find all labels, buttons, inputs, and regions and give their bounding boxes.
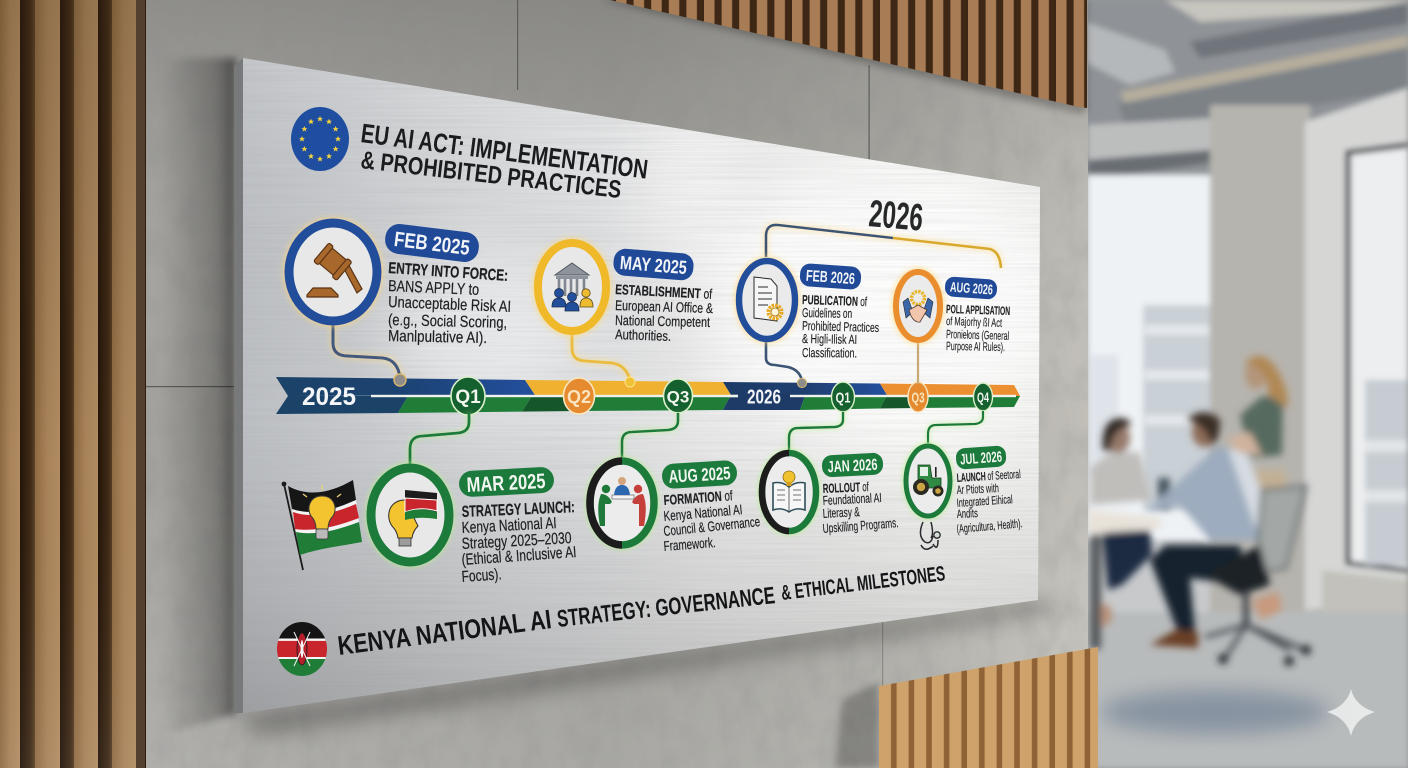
icon: handshake and gear: [903, 292, 933, 322]
centre line: [371, 395, 1016, 397]
description: PUBLICATION of: [802, 292, 868, 309]
description: ESTABLISHMENT of: [615, 281, 713, 302]
standing woman: [1228, 356, 1288, 540]
panel shadow: [160, 58, 1062, 736]
connector: [789, 412, 843, 450]
Q1 2025: Q1: [455, 387, 481, 408]
description: FORMATION of: [663, 487, 733, 508]
connector: [766, 342, 807, 388]
icon: tractor: [913, 465, 944, 496]
description: [822, 479, 899, 536]
milestone: Feb 2025: [289, 222, 511, 386]
background: concrete wall: [140, 0, 1088, 768]
description: [802, 292, 880, 360]
description: Framework.: [663, 534, 716, 554]
connector: [917, 343, 919, 384]
description: [956, 467, 1023, 536]
date pill: [799, 263, 862, 290]
date pill: FEB 2025: [393, 228, 471, 260]
connector: [622, 413, 678, 457]
description: Purpose AI Rules).: [946, 339, 1005, 354]
milestone: Jul 2026: [906, 411, 1023, 549]
description: Focus).: [461, 566, 502, 586]
Q1 2025: [451, 377, 485, 415]
table: [1088, 510, 1162, 649]
icon: Kenya badge: [277, 622, 327, 677]
description: Feundational AI: [822, 490, 882, 508]
description: Andits: [956, 506, 978, 521]
heading: Kenya National AI Strategy title: & ETHICAL MILESTONES: [780, 562, 946, 605]
ring: [371, 468, 449, 562]
milestone: Feb 2026: [739, 261, 880, 388]
description: Manlpulative AI).: [388, 328, 487, 347]
Q3 2026: Q3: [912, 390, 924, 406]
connector: [333, 325, 406, 386]
description: Kenya National AI: [663, 501, 743, 524]
description: Guidelines on: [802, 305, 852, 321]
icon: sparkle watermark: [1327, 689, 1375, 736]
icon: gavel: [307, 243, 362, 297]
description: [663, 487, 761, 554]
date pill: MAR 2025: [466, 470, 546, 497]
ring: [896, 272, 940, 340]
description: ENTRY INTO FORCE:: [388, 260, 509, 285]
description: Integrated Eihical: [956, 492, 1013, 510]
Q1 2026: [832, 382, 854, 412]
year label 2025: 2025: [302, 383, 356, 411]
ring: [762, 453, 816, 531]
ring: [739, 261, 795, 339]
date pill: MAY 2025: [619, 253, 688, 279]
description: Prohibited Practices: [802, 318, 880, 335]
connector: [410, 413, 469, 465]
date pill: [384, 222, 480, 264]
description: Authorities.: [615, 326, 671, 344]
Q3 2026: [908, 382, 928, 412]
description: [946, 302, 1010, 354]
heading: Kenya National AI Strategy title: [336, 562, 946, 661]
description: ROLLOUT of: [822, 479, 869, 496]
icon: bulb and Kenya flag: [389, 490, 437, 546]
description: Classification.: [802, 345, 857, 360]
date pill: [661, 460, 738, 489]
description: LAUNCH of Seetoral: [956, 467, 1021, 485]
background: left wood slats: [0, 0, 146, 768]
description: [615, 281, 714, 344]
icon: book and bulb: [773, 471, 805, 512]
icon: institution and people: [552, 263, 593, 311]
icon: stethoscope: [920, 522, 938, 549]
description: (Agricultura, Health).: [956, 516, 1023, 536]
seated woman: [1090, 418, 1170, 626]
background: top wood slats: [600, 0, 1087, 114]
Q3 2025: Q3: [667, 388, 689, 406]
date pill: AUG 2025: [668, 463, 731, 487]
Q4 2026: [974, 383, 992, 411]
icon: document with gear: [754, 277, 782, 321]
description: [461, 499, 577, 586]
ring: [289, 223, 377, 321]
date pill: JAN 2026: [827, 457, 878, 476]
description: Ar Ptiots with: [956, 481, 999, 497]
description: & Higli-Ilisk AI: [802, 331, 857, 347]
description: (e.g., Social Scoring,: [388, 312, 507, 332]
date pill: JUL 2026: [960, 449, 1003, 468]
Q3 2025: [664, 379, 692, 413]
heading: EU AI Act title: EU AI ACT: IMPLEMENTATION: [359, 118, 650, 185]
milestone: Jan 2026: [762, 412, 899, 536]
milestone: Aug 2025: [590, 413, 761, 554]
year label 2026: 2026: [747, 386, 781, 408]
concrete column: [1210, 105, 1310, 615]
upper and lower colour segments: [276, 377, 1020, 414]
date pill: [613, 248, 694, 281]
Q2 2025: [564, 378, 594, 414]
milestone: Aug 2026: [896, 272, 1010, 384]
ring: [906, 446, 950, 516]
office chair: [1205, 486, 1311, 666]
heading: Kenya National AI Strategy title: KENYA NATIONAL AI: [336, 604, 553, 661]
date pill: AUG 2026: [949, 279, 994, 298]
description: of Majorhy ßI Act: [946, 314, 1003, 330]
heading: 2026: 2026: [867, 193, 925, 240]
description: Literasy &: [822, 504, 860, 521]
description: European AI Office &: [615, 297, 714, 316]
seated man: [1145, 412, 1264, 648]
background: bottom wood slats: [835, 647, 1098, 768]
description: STRATEGY LAUNCH:: [461, 499, 575, 521]
heading: EU flag badge: [291, 107, 349, 171]
description: POLL APPLISATION: [946, 302, 1010, 318]
description: BANS APPLY to: [388, 278, 480, 299]
description: Strategy 2025–2030: [461, 530, 572, 553]
description: Unacceptable Risk AI: [388, 294, 511, 316]
description: National Competent: [615, 312, 710, 330]
connector: [572, 335, 635, 387]
Q4 2026: Q4: [977, 389, 989, 405]
floor: [1088, 612, 1408, 768]
ceiling: [1080, 0, 1408, 180]
ring: [590, 461, 654, 545]
description: Council & Governance: [663, 513, 761, 539]
description: (Ethical & Inclusive AI: [461, 544, 577, 569]
ring: [538, 243, 606, 331]
icon: council meeting: [598, 477, 646, 526]
connector: [928, 411, 983, 443]
background: blurred meeting people: [1088, 356, 1311, 666]
Q2 2025: Q2: [567, 387, 591, 407]
heading: Kenya National AI Strategy title: STRATEGY: GOVERNANCE: [556, 582, 776, 633]
description: Upskilling Programs.: [822, 515, 899, 536]
milestone: Mar 2025: [371, 413, 577, 586]
timeline band: [276, 377, 1020, 414]
description: Proniełons (General: [946, 327, 1009, 343]
description: Kenya National AI: [461, 515, 557, 537]
Q1 2026: Q1: [836, 390, 850, 406]
right window: [1305, 88, 1408, 622]
icon: waving Kenya flag with bulb: [282, 480, 362, 570]
description: [388, 260, 511, 347]
panel: brushed metal sign: [234, 50, 1060, 720]
background: office interior: [1080, 0, 1408, 768]
heading: EU AI Act title: & PROHIBITED PRACTICES: [359, 146, 623, 204]
left window: [1088, 175, 1212, 615]
quarter nodes: [451, 377, 992, 415]
date pill: FEB 2026: [805, 268, 855, 288]
milestone: May 2025: [538, 243, 714, 387]
bracket: 2026 connector: [766, 225, 1001, 268]
